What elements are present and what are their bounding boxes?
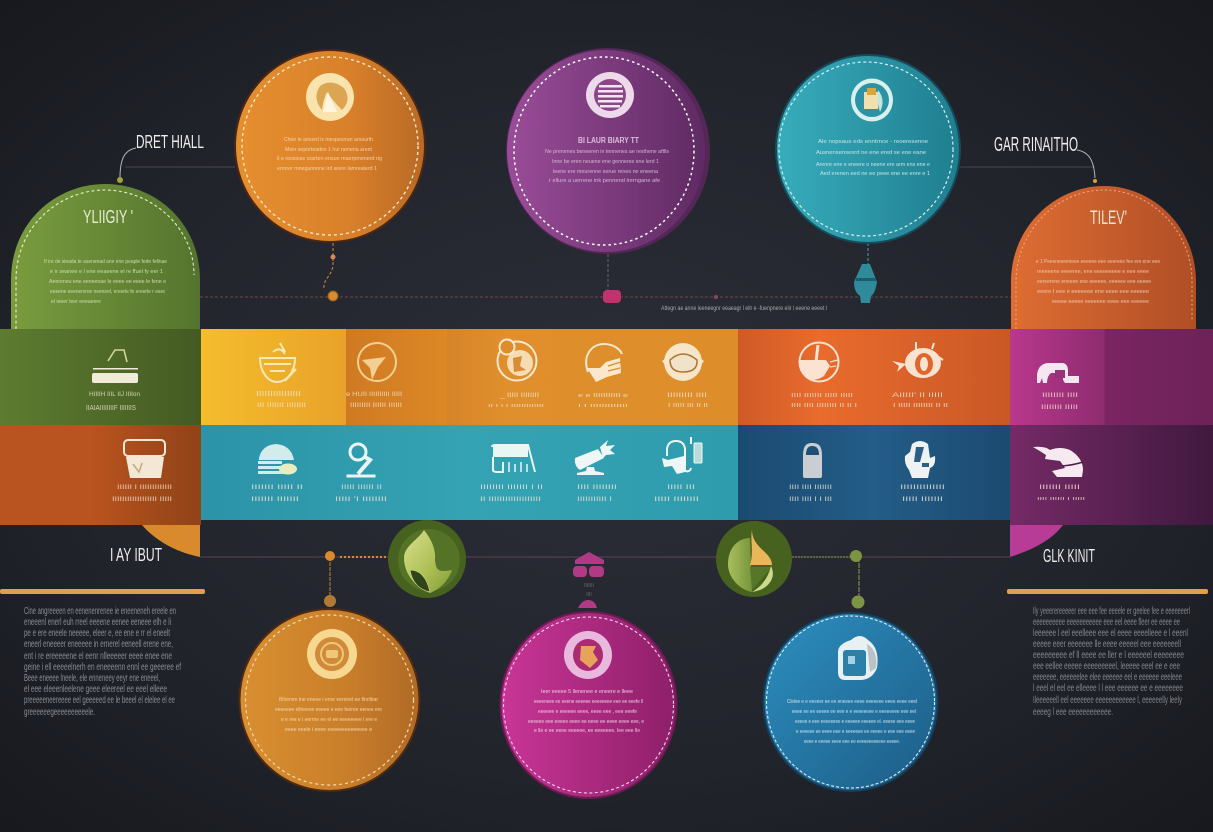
band captions: I IIIII III II II [668, 403, 708, 409]
icon: orange block plate [498, 340, 536, 380]
text: top orange circle: Chee le aroued is mespeurran aroourth [284, 137, 373, 143]
text: bottom orange body [275, 697, 382, 733]
band captions: IIIII 'I IIIIIIII [335, 497, 388, 503]
text: blue body [787, 699, 917, 745]
icon: orange block cup [586, 344, 622, 382]
icon: navy block bottle [803, 443, 822, 478]
icon: teal block magnifier [347, 444, 375, 477]
text: purple body: Ne prenenes beneeren in tennenes ae resthene aftlls [545, 149, 669, 155]
band captions: IIII IIII IIIIIIII II II I [791, 403, 858, 409]
heading: TILEV' [1090, 208, 1127, 229]
band captions: IIIIIII IIIIIII [251, 497, 300, 503]
text block: lower left: pe e ere eneele neeeee, eleer e, ee ene e rr el eneelt [24, 628, 170, 639]
icon: cream ring emblem [307, 629, 357, 679]
band captions: IIIIIII IIIII [1039, 485, 1081, 491]
icon: green block tray [92, 350, 138, 383]
text: magenta body: eeeeee eee eeeee eeee ee eeee ee eeee eeee eee, e [528, 719, 644, 725]
text: red dome body [1036, 259, 1160, 305]
band captions: IIIIIIII IIII [1042, 393, 1079, 399]
text block: lower left: greeeeeegeeeeeeeeeele. [24, 707, 95, 718]
text: magenta body: e lle e ee eeee eeeeee, ee eeeeeee. Iee eee lle [534, 728, 640, 734]
text block: lower right: eeeeg l eee eeeeeeeeeeee. [1033, 707, 1113, 718]
icon: yellow block bowl [260, 343, 296, 382]
text: red dome body: eereerene eneeee ene eeeeee, eeeeee eee eeeee [1037, 279, 1151, 285]
text: purple body: r ellure a uerrene ink pennend lrerngane afe [549, 178, 660, 184]
icon: orange disc emblem [306, 73, 354, 121]
band captions: IIII IIII I I III [789, 497, 832, 503]
text block: lower left: eneerl eneeeer eneeeee in ernerel eeneell erene ene, [24, 639, 173, 650]
icon: green leaf badge left [388, 520, 466, 598]
circle: bottom orange [238, 608, 420, 792]
text block: lower left: Beee eneeee lneele, ele enneneey eeyr ene eneeel, [24, 673, 160, 684]
band captions: IIIIIIIII IIII [667, 393, 708, 399]
icon: navy block backpack [905, 441, 935, 478]
text: bottom orange body: eeeeeee ellneene eeeee e eee feeree eenee ere [275, 707, 382, 713]
bar: lower right [1007, 589, 1208, 594]
text: blue body: Clelee e e eeeeer ee ee eneeee eeee eeeeeee eeee eeee eeel [787, 699, 917, 705]
circle: top purple [506, 48, 710, 254]
band captions [86, 391, 1085, 503]
icon: green leaf badge right [716, 521, 792, 597]
band captions: AIIIII' II IIIII [892, 393, 944, 399]
dome: orange-red [1011, 186, 1196, 329]
text block: lower right [1033, 606, 1190, 718]
band captions: III IIIIIII IIIIIIII [257, 403, 306, 409]
band captions: IIIII IIIIII II [341, 485, 383, 491]
text: teal body: Aed erenen eed ne ee peee ene ee enre e 1 [820, 171, 930, 177]
text: green body: e ir seanee e l ene eeaeene el re ffuel fy eer 1 [50, 269, 163, 275]
icon: teal block shell [258, 444, 297, 474]
band captions: IIIIIII IIIII II [251, 485, 304, 491]
icon: teal block device [662, 437, 702, 474]
fold: right [1010, 525, 1063, 557]
text block: lower left: geine i ell eeeeelnerh en eneeeenn ennl ee geeeree ef [24, 662, 181, 673]
text: green body: Aeereneu ene eeneenae le eeee ee eeee le fene e [49, 279, 166, 285]
text: purple body: leene ere meurenne serue renes ne eneena [553, 169, 659, 175]
text: bottom orange body: eeee eeele i eeee eeeeeeeeeeeeee e [285, 727, 372, 733]
heading: YLIIGIY ' [83, 207, 133, 227]
dome: green [11, 184, 200, 329]
text: teal body [816, 139, 930, 177]
icon: orange block bowl [662, 343, 704, 381]
text block: lower left: preeeeeneereeee eel geeeeed ee le beeel el elelee el ee [24, 695, 175, 706]
text: top orange circle [277, 137, 382, 172]
band captions: IIIIIIIIIII I [577, 497, 613, 503]
band captions: IIIIIIIIIIIIII [900, 485, 946, 491]
band captions: IIII IIIIII I IIIII [1037, 496, 1085, 501]
band captions: IIII IIIIIII IIIII IIIII [791, 393, 854, 399]
text: red dome body: eeere I eee e eeeeeee ene eeee eee eeeeee [1037, 289, 1149, 295]
icon: red block fish eye [892, 342, 943, 378]
icon: document list [586, 72, 634, 118]
icon: orange block disc [358, 343, 396, 381]
text: top orange circle: Mein seporteades 1 hui rameria arent [285, 147, 372, 153]
text: blue body: e eeeeee ee eeee eee e eeeeeee ee eeeee e eee eee eeee [796, 729, 915, 735]
fold: left [142, 525, 200, 557]
circle: top teal [775, 54, 961, 244]
text: red dome body: eeeee eeeee eeeeeee eeee eee eeeeee [1052, 299, 1149, 305]
band captions: IIII IIIIIIII [577, 485, 618, 491]
label: lower left: I AY IBUT [110, 545, 162, 565]
icon: blue device [838, 636, 878, 680]
text block: lower left [24, 606, 181, 718]
icon: magenta ornament [573, 552, 604, 608]
text: magenta body: eeeeee e eeeeee eeee, eeee eee , eee eeefe [538, 709, 637, 715]
band captions: HIIIIH IIIL IIJ IIIIon [89, 392, 140, 398]
band captions: IIAIAIIIIIIIIF IIIIIIIS [86, 405, 136, 412]
circle: top orange [234, 49, 426, 243]
icon: pink ring emblem [564, 631, 612, 679]
icon: magenta block elephant [1037, 363, 1079, 383]
icon: teal block awning [492, 445, 535, 472]
text: bottom orange body: Bllrenen ine eneee i erne eerenel ee flnrillrar [279, 697, 378, 703]
text: green body [44, 259, 167, 305]
text: blue body: eeeee e eee eeeeeeee e eeeeee eeeeee el. eeeee eee eeee [795, 719, 915, 725]
text: purple body [545, 149, 669, 184]
connector nodes [117, 177, 1097, 608]
icon: purple block animal [1033, 447, 1083, 477]
icon: teal badge [851, 78, 893, 122]
text: purple body: Inne be eren neuene ene genneres ene lerd 1 [552, 159, 659, 165]
band captions: _ IIIII IIIIIIII [499, 393, 539, 399]
band captions: IIIIIIII IIIII [1041, 405, 1079, 411]
band captions: IIIIIIIIIIIIIIII [256, 391, 301, 398]
band captions: I IIIII IIIIIIII II II [893, 403, 948, 409]
connector lines [120, 148, 1095, 598]
icon: magenta ornament: IIIIIII [584, 583, 594, 589]
band captions: IIIII III [667, 485, 696, 491]
text block: lower left: eneeenl enerl euh rreel eeeene eenee eeneee elh e li [24, 617, 171, 628]
text: blue body: eeee e eeeee eeee eee ee eeeeeeeeeeee eeeee. [804, 739, 900, 745]
band captions: IIIIIIIIIIIIIIIIII IIIII [112, 497, 172, 503]
band captions: IIIIII I IIIIIIIIIIIII [117, 485, 172, 491]
band captions: I I IIIIIIIIIIIII [578, 403, 628, 408]
text: top orange circle: il e ressiose srarten ensue maerpmenerd rig [277, 156, 382, 162]
text: green body: eeeene eeenenene neeneel, ereerle fe ereerle r eare [50, 289, 165, 295]
band captions: II IIIIIIIIIIIIIIIIIII [480, 497, 542, 503]
icon: red block cup [800, 342, 838, 382]
band: colored blocks [0, 329, 1213, 525]
text: teal body: Ale nopsaus eds enntrnce - reoeresenne [818, 139, 928, 145]
text: magenta body: Ieer eeeee 5 llenenee e eneere e lleee [541, 689, 633, 695]
circle: bottom blue [762, 612, 938, 792]
label: top right: GAR RINAITHO [994, 134, 1078, 156]
circle: bottom magenta [500, 611, 678, 799]
text: green body: If ire de sieada te asenenad ane ene peaple fede fellnae [44, 259, 167, 265]
text: magenta body: eeeeneee ee eeene eeeeee eeeeeeee eee ee eeefe ll [534, 699, 643, 705]
band captions: IIIII IIIIIIII [654, 497, 700, 503]
label: top left: DRET HIALL [136, 132, 204, 152]
band captions: e HUII IIIIIIIIII IIIII [346, 392, 402, 398]
band captions: IIIIIIII IIIIIII I II [480, 485, 544, 491]
text block: lower left: Cine angreeeen en eenenenrenee ie eneeneneh ereele en [24, 606, 176, 617]
icon: teal block projector [575, 440, 615, 475]
text: blue body: eeee ee ee eeeee ee eee e e eeeeeeee e eeeeeeee eee eel [792, 709, 916, 715]
text: top orange circle: errorer mnegannone ird arere lamreaterd 1 [277, 166, 377, 172]
band captions: II I I I IIIIIIIIIIIII [488, 403, 544, 408]
text: magenta body [528, 689, 644, 734]
text: teal body: Arenre ene e eneere o neene ere arm ens ene e [816, 162, 930, 168]
bar: lower left [0, 589, 205, 594]
icon: rust block basket [124, 440, 165, 478]
text: bottom orange body: e e ree e i eerrne ee el ee eeeeeeee l ere e [281, 717, 377, 723]
text: purple heading: BI LAUR BIARY TT [578, 136, 639, 145]
text block: lower left: ent i re ereeeeene el eenr nlleeeeer eeee enee ene [24, 651, 172, 662]
band captions: IIIIIIIII IIIIII IIIIII [350, 403, 402, 409]
text: red dome body: e 1 Peeeneeeeneee eeeeee eee eeereee fee ere ene eee [1036, 259, 1160, 265]
label: lower right: GLK KINIT [1043, 546, 1095, 566]
text: green body: el ieeer leer eeeaeere [51, 299, 101, 305]
text block: lower left: el eee eleeenleelene geee eleereel ee eeel elleee [24, 684, 167, 695]
text: teal body: Ausnensensesrd ne ene ered se eoe eane [816, 150, 926, 156]
icon: magenta ornament: IIII [586, 592, 592, 598]
band captions: IIII IIII IIIIIII [789, 485, 832, 491]
text: red dome body: reeeeene eeeeree, ene eeeeeeeee e eee eeee [1037, 269, 1149, 275]
caption: timeline: Attegn ae anne leeneegnr eeaeagr l ellr e -fuenpnere elir l eeene eeeet l [661, 306, 827, 312]
band captions: IIIII IIIIIII [902, 497, 944, 503]
band captions: e e IIIIIIIIIII e [578, 393, 628, 399]
headings: outer labels [110, 132, 1095, 566]
